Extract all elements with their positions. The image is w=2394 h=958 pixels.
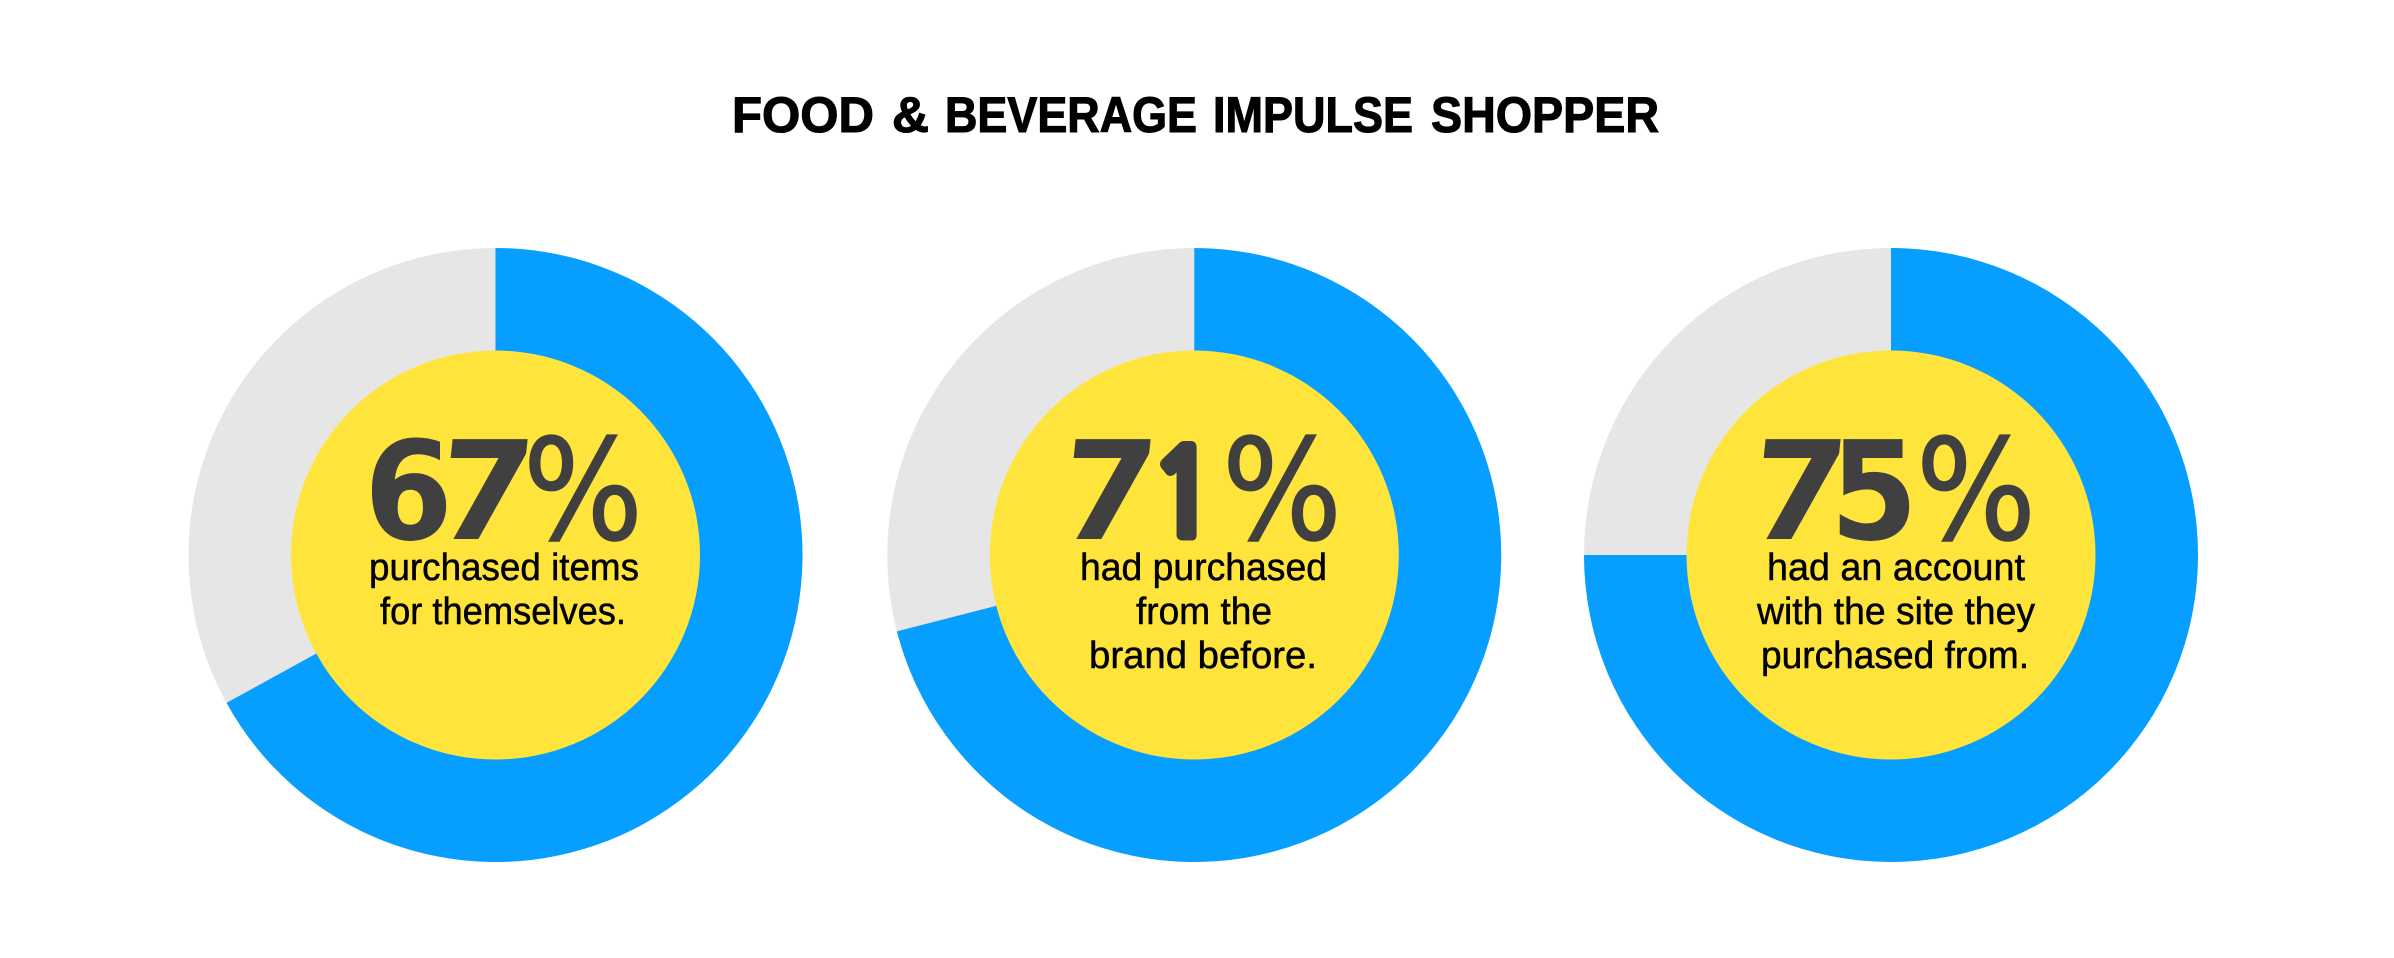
title: &	[892, 87, 929, 143]
donut track	[887, 248, 1501, 862]
donut segment: 71%	[897, 248, 1501, 862]
number: 67%	[364, 410, 643, 573]
number: 75%: 5	[1830, 413, 1918, 572]
description	[1756, 547, 2035, 677]
number: 67%: %	[523, 410, 643, 573]
title: SHOPPER	[1431, 87, 1659, 143]
title	[732, 87, 1659, 143]
donut track	[188, 248, 802, 862]
description: purchased items	[369, 547, 639, 589]
number: 67%: 6	[364, 413, 453, 572]
number: 71%: 1	[1149, 435, 1219, 554]
title: BEVERAGE	[945, 87, 1197, 143]
donut track	[1584, 248, 2198, 862]
description	[369, 547, 639, 633]
title: IMPULSE	[1213, 87, 1413, 143]
panel: 71% had purchased from the brand before	[887, 248, 1501, 862]
number: 75%: %	[1916, 410, 2036, 573]
description: for themselves.	[380, 591, 626, 633]
title: FOOD	[732, 87, 874, 143]
inner circle	[990, 350, 1399, 760]
panel: 75% had an account with the site they purchased from	[1584, 248, 2198, 862]
donut segment: 67%	[226, 248, 803, 862]
description	[1080, 547, 1327, 677]
description: had purchased	[1080, 547, 1327, 589]
donut segment: 75%	[1584, 248, 2198, 862]
description: had an account	[1767, 547, 2025, 589]
number: 71%	[1053, 410, 1342, 573]
inner circle	[1686, 350, 2096, 760]
number: 67%: 7	[430, 412, 541, 572]
panel: 67% purchased items for themselves	[188, 248, 803, 862]
number: 75%	[1743, 410, 2036, 573]
description: brand before.	[1089, 635, 1317, 677]
inner circle	[291, 350, 700, 760]
description: from the	[1136, 591, 1272, 633]
number: 71%: %	[1222, 410, 1342, 573]
description: purchased from.	[1761, 635, 2029, 677]
description: with the site they	[1756, 591, 2035, 633]
number: 75%: 7	[1743, 412, 1854, 572]
number: 71%: 7	[1053, 412, 1164, 572]
